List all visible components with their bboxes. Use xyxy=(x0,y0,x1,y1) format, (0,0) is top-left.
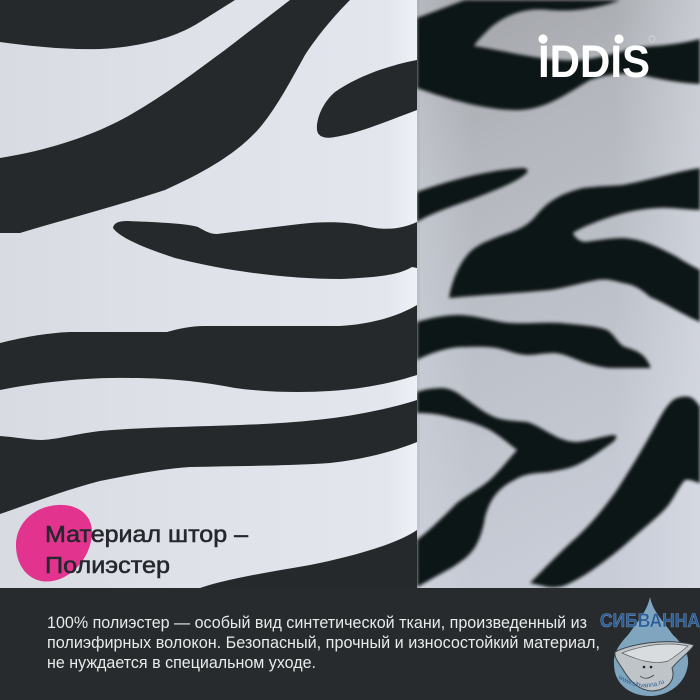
fold shadow between curtain panels xyxy=(417,0,420,588)
icon: water drop xyxy=(614,597,688,696)
description text: не нуждается в специальном уходе. xyxy=(47,654,316,672)
description text xyxy=(47,614,600,672)
logo: iddis: IDDIS xyxy=(538,36,650,87)
icon: smiling bathtub xyxy=(615,642,694,691)
description text: полиэфирных волокон. Безопасный, прочный и износостойкий материал, xyxy=(47,634,600,652)
description text: 100% полиэстер — особый вид синтетической ткани, произведенный из xyxy=(47,614,587,632)
watermark: sibvanna logo xyxy=(600,597,700,696)
heading: Материал штор – xyxy=(45,521,248,547)
heading: Полиэстер xyxy=(45,552,170,578)
panel: blurred curtain fold with zebra print xyxy=(417,0,700,588)
panel: sharp curtain fold with zebra print xyxy=(0,0,417,588)
heading xyxy=(45,521,248,578)
panel: dark description bar xyxy=(0,588,700,700)
icon: pink blob behind heading xyxy=(16,505,92,582)
watermark url: www.sibvanna.ru xyxy=(618,675,664,688)
